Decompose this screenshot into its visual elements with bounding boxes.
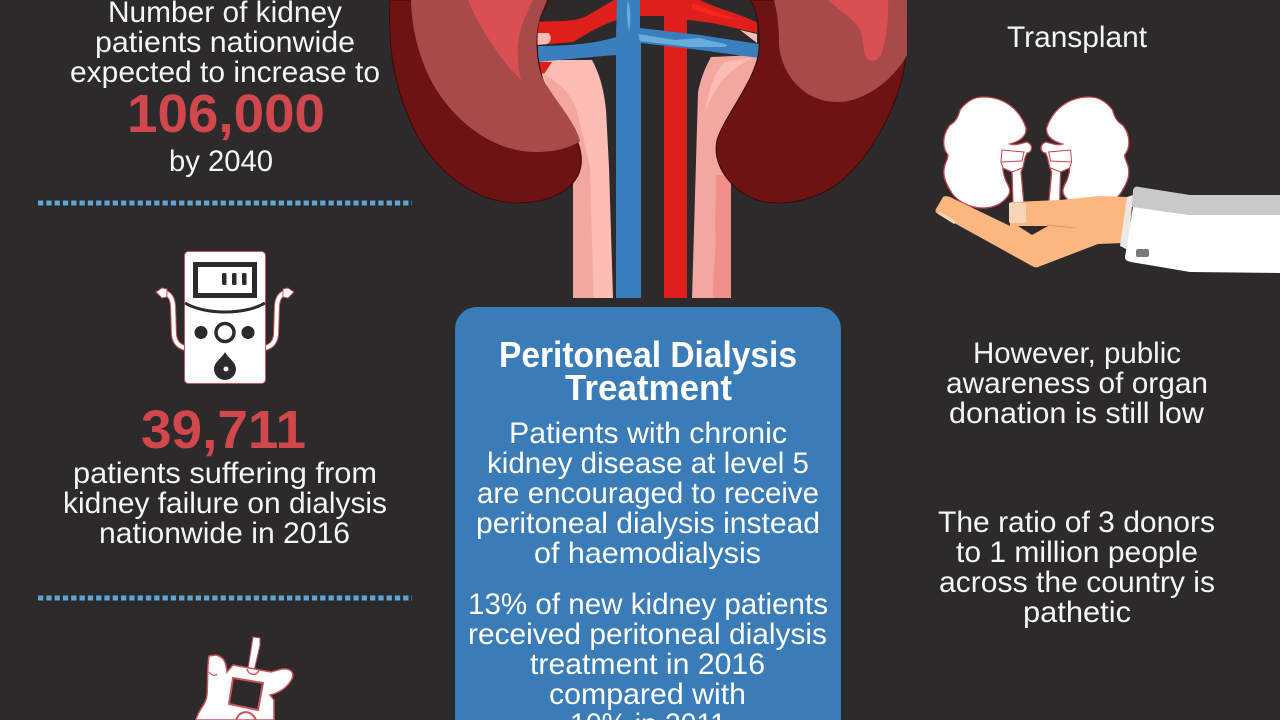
shirt cuff xyxy=(1120,195,1133,250)
text: donor ratio xyxy=(938,506,1215,629)
text: public awareness: awareness of organ xyxy=(946,367,1208,400)
stat: patients on dialysis in 2016: patients suffering from xyxy=(73,457,377,490)
panel text: recommendation: of haemodialysis xyxy=(534,537,761,570)
renal arteries xyxy=(538,0,757,298)
right donor kidney xyxy=(1041,97,1129,208)
panel heading: Treatment xyxy=(565,367,732,408)
text: public awareness xyxy=(946,337,1208,430)
panel text: 2016 figure: compared with xyxy=(549,678,746,711)
left kidney xyxy=(390,0,581,203)
illustration: kidneys and blood vessels xyxy=(390,0,907,298)
text: donor ratio: to 1 million people xyxy=(956,536,1198,569)
stat: patients expected by 2040: by 2040 xyxy=(169,145,273,178)
left ureter xyxy=(540,60,613,298)
stat: patients on dialysis in 2016 xyxy=(63,400,387,550)
text: public awareness: donation is still low xyxy=(949,397,1205,430)
panel text: 2016 figure xyxy=(468,588,828,720)
icon: dialysis machine xyxy=(156,252,294,384)
text: donor ratio: The ratio of 3 donors xyxy=(938,506,1215,539)
panel text: 2016 figure: 13% of new kidney patients xyxy=(468,588,828,621)
panel text: recommendation: are encouraged to receive xyxy=(477,477,819,510)
text: donor ratio: across the country is xyxy=(939,566,1215,599)
panel text: 2016 figure: received peritoneal dialysis xyxy=(468,618,827,651)
text: donor ratio: pathetic xyxy=(1023,596,1131,629)
panel text: recommendation: Patients with chronic xyxy=(509,417,787,450)
renal veins xyxy=(538,0,759,298)
panel heading xyxy=(499,334,797,408)
stat: patients on dialysis in 2016: kidney failure on dialysis xyxy=(63,487,387,520)
heading: transplant: Transplant xyxy=(1007,21,1147,54)
panel heading: Peritoneal Dialysis xyxy=(499,334,797,375)
stat: patients expected by 2040 xyxy=(70,0,380,178)
icon: hand holding donor kidneys xyxy=(935,97,1280,273)
panel text: recommendation xyxy=(476,417,820,570)
left donor kidney xyxy=(944,97,1032,208)
stat: patients on dialysis in 2016: nationwide in 2016 xyxy=(99,517,350,550)
panel text: 2016 figure: treatment in 2016 xyxy=(530,648,765,681)
panel: peritoneal dialysis treatment xyxy=(455,307,841,720)
text: public awareness: However, public xyxy=(973,337,1181,370)
hand xyxy=(935,196,1127,267)
right ureter xyxy=(692,55,758,298)
right kidney xyxy=(716,0,907,203)
icon: hand holding glucose meter xyxy=(196,637,293,720)
stat: patients on dialysis in 2016: 39,711 xyxy=(141,400,306,460)
panel text: recommendation: peritoneal dialysis instead xyxy=(476,507,820,540)
stat: patients expected by 2040: expected to increase to xyxy=(70,56,380,89)
stat: patients expected by 2040: 106,000 xyxy=(127,84,325,144)
stat: patients expected by 2040: patients nationwide xyxy=(95,26,355,59)
panel text: recommendation: kidney disease at level 5 xyxy=(487,447,809,480)
